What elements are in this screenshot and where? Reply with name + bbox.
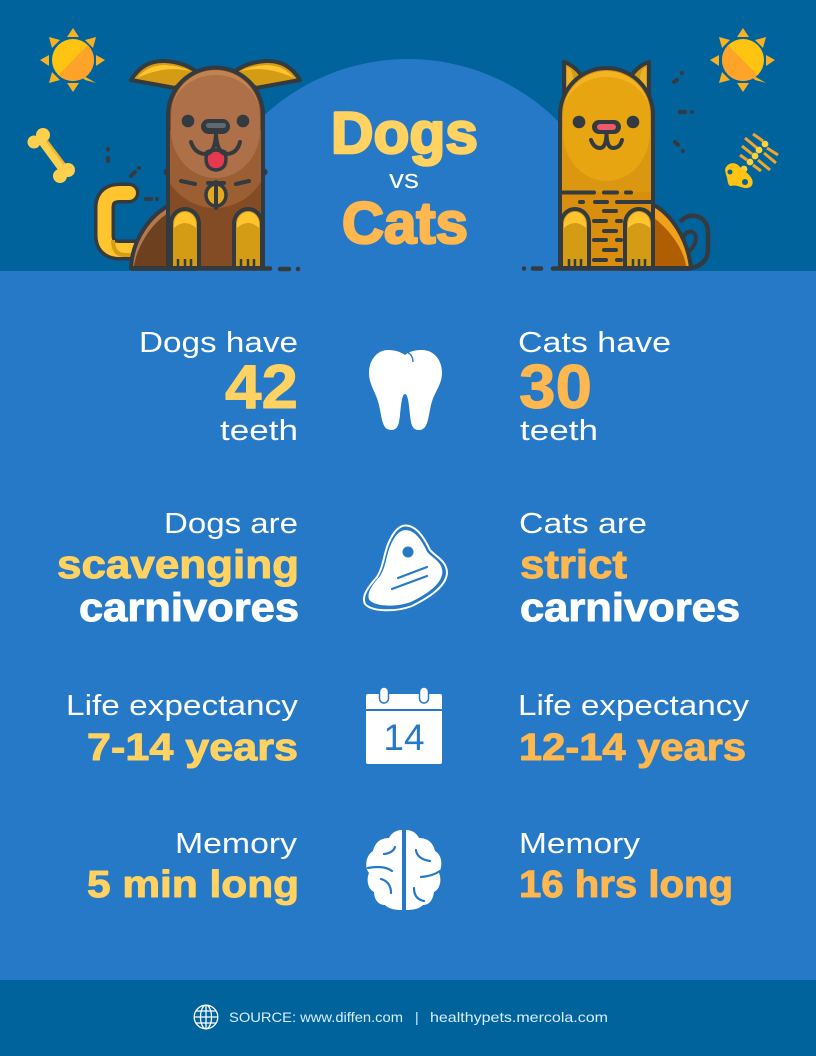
icon: globe [194,1005,218,1029]
dog ground line [132,266,298,271]
cat mouth [591,134,622,148]
left stat: diet: Dogs are [164,508,298,540]
dog ears [131,61,300,88]
dog haunch [131,204,172,268]
main background panel [0,271,816,980]
dog eyes [182,115,249,127]
dog motion dashes [108,149,157,199]
right stat: teeth: 30 [519,353,592,422]
icon: calendar [366,687,442,764]
icon: calendar: 14 [383,717,425,758]
footer band [0,980,816,1056]
right stat: diet [519,508,740,630]
right stat: life expectancy: 12-14 years [519,727,746,769]
cat eyes [573,116,639,128]
left stat: diet [57,508,299,630]
footer source text: | [415,1009,419,1025]
dog mouth [191,134,240,154]
cat nose [592,120,621,134]
cat body and head [555,68,658,268]
cat stripes [563,192,652,260]
right stat: life expectancy [518,690,750,769]
dog nose [201,119,230,134]
footer source text [229,1009,608,1025]
right stat: diet: strict [520,543,627,587]
right stat: memory [519,828,733,906]
left stat: life expectancy [66,690,299,769]
footer source text: SOURCE: www.diffen.com [229,1009,403,1025]
left stat: teeth: Dogs have [139,327,298,359]
left stat: life expectancy: Life expectancy [66,690,299,722]
dog collar [181,181,249,208]
icon: fish skeleton [725,134,778,188]
illustration: cat [524,62,708,268]
left stat: teeth: teeth [220,415,298,447]
icon: bone [28,128,75,183]
title: Dogs: Dogs [331,101,478,166]
right stat: life expectancy: Life expectancy [518,690,750,722]
right stat: teeth: Cats have [518,327,671,359]
left stat: teeth: 42 [225,353,298,422]
left stat: life expectancy: 7-14 years [87,727,298,769]
cat front legs [561,209,653,268]
footer source text: healthypets.mercola.com [430,1009,608,1025]
cat ground line [524,266,690,271]
left stat: diet: scavenging [57,543,299,587]
right stat: teeth: teeth [520,415,598,447]
dog body and head [160,68,270,268]
left stat: memory: Memory [175,828,298,860]
cat motion dashes [674,73,692,151]
icon: tooth [369,350,442,430]
left stat: memory: 5 min long [87,864,299,906]
left stat: diet: carnivores [79,586,299,630]
left stat: teeth [139,327,298,447]
icon: left sun [40,28,105,92]
right stat: memory: Memory [519,828,641,860]
icon: brain [366,830,441,910]
title: Cats: Cats [342,191,468,256]
title: vs: vs [389,164,419,194]
dog collar tips [164,168,268,176]
left stat: memory [87,828,299,906]
cat tail [680,216,708,268]
icon: right sun [710,28,775,92]
dog tongue [206,150,226,170]
icon: steak [364,525,447,610]
cat ears [564,62,649,95]
right stat: diet: Cats are [519,508,647,540]
right stat: diet: carnivores [520,586,740,630]
right stat: memory: 16 hrs long [519,864,733,906]
dog front legs [171,209,262,268]
right stat: teeth [518,327,671,447]
header background [0,0,816,271]
cat haunch [652,204,691,268]
illustration: dog [104,61,300,269]
title dome [196,59,620,271]
dog tail [104,193,140,255]
